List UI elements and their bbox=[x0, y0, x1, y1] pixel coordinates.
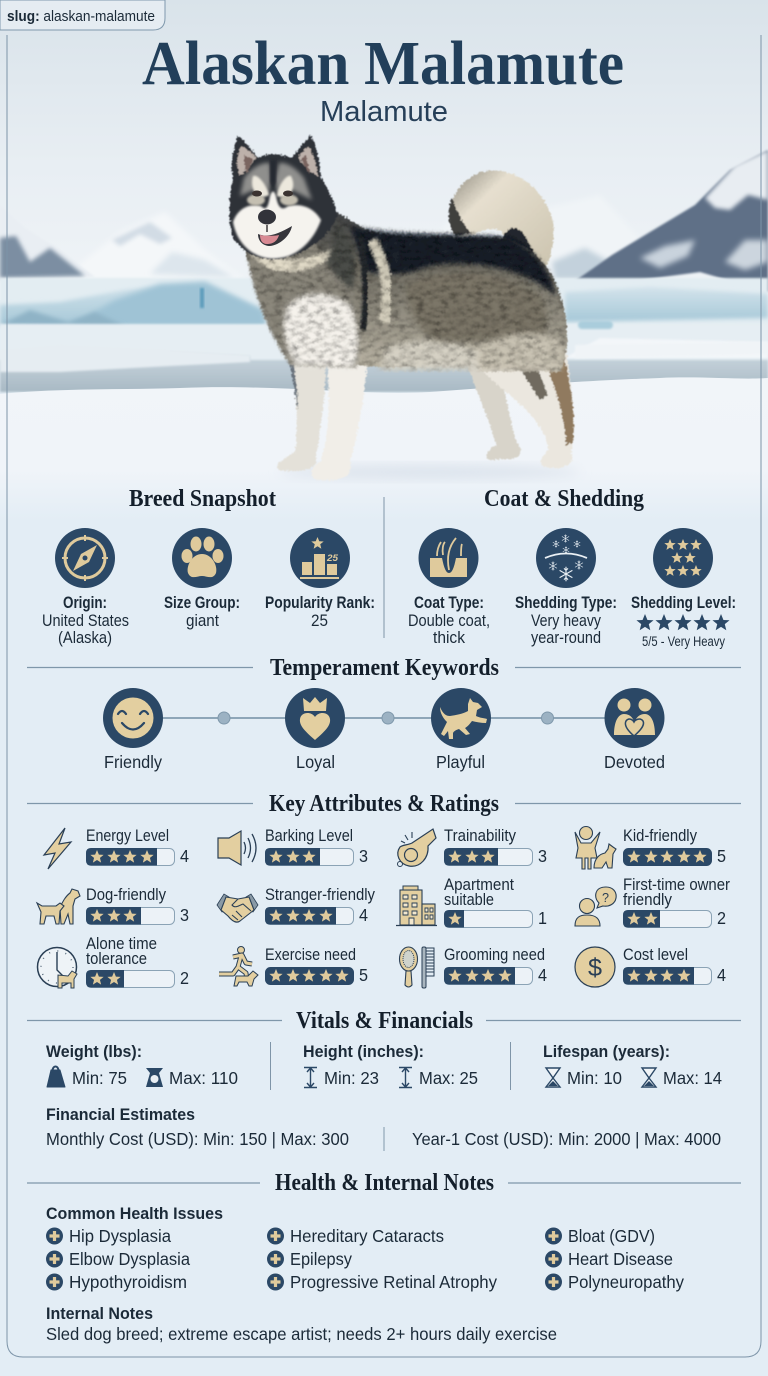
attribute: grooming need: 4 bbox=[538, 965, 547, 985]
torso bbox=[243, 195, 567, 372]
attribute: apartment suitable: Apartment bbox=[444, 875, 514, 894]
attribute: cost level: $ bbox=[588, 954, 602, 982]
attribute: dog-friendly: 3 bbox=[180, 905, 189, 925]
attribute: trainability: 3 bbox=[538, 846, 547, 866]
internal notes: Internal Notes bbox=[46, 1304, 153, 1323]
vitals: weight: Min: 75 bbox=[72, 1068, 127, 1088]
attribute: stranger-friendly bbox=[217, 885, 375, 925]
heading: breed snapshot: Breed Snapshot bbox=[129, 486, 276, 512]
heading: temperament keywords: Temperament Keywords bbox=[270, 655, 499, 681]
common health issues bbox=[46, 1204, 684, 1292]
shedding type text: Shedding Type: bbox=[515, 593, 617, 612]
attribute: dog-friendly: Dog-friendly bbox=[86, 885, 166, 904]
attribute: apartment suitable: suitable bbox=[444, 890, 494, 909]
connector line with dots bbox=[160, 712, 610, 724]
near rear leg bbox=[468, 345, 574, 468]
popularity rank text: 25 bbox=[311, 611, 328, 630]
icon: podium rank: 25 bbox=[326, 553, 339, 563]
icon: playful leaping dog bbox=[431, 688, 491, 748]
subtitle: Malamute bbox=[320, 96, 448, 128]
vitals: lifespan: Lifespan (years): bbox=[543, 1042, 670, 1061]
attribute: alone time tolerance: Alone time bbox=[86, 934, 157, 953]
attribute: trainability bbox=[398, 826, 547, 866]
common health issues: Common Health Issues bbox=[46, 1204, 223, 1223]
head base bbox=[229, 135, 338, 260]
icon: devoted people heart bbox=[604, 688, 664, 748]
attribute: alone time tolerance bbox=[38, 934, 189, 988]
coat type text bbox=[408, 593, 490, 647]
tail plume bbox=[450, 171, 554, 270]
attribute: alone time tolerance: tolerance bbox=[86, 949, 147, 968]
common health issues: Hereditary Cataracts bbox=[290, 1226, 444, 1246]
divider bbox=[383, 497, 385, 638]
attribute: cost level bbox=[575, 945, 726, 987]
attribute: kid-friendly: 5 bbox=[717, 846, 726, 866]
attribute: exercise need bbox=[219, 945, 368, 986]
vitals: height bbox=[303, 1042, 478, 1088]
common health issues: Epilepsy bbox=[290, 1249, 352, 1269]
attribute: stranger-friendly: Stranger-friendly bbox=[265, 885, 375, 904]
coat type text: Coat Type: bbox=[414, 593, 484, 612]
icon: coat hair follicle bbox=[418, 528, 478, 588]
financial estimates: Financial Estimates bbox=[46, 1105, 195, 1124]
panel: breed snapshot bbox=[42, 486, 375, 647]
vitals: lifespan: Min: 10 bbox=[567, 1068, 622, 1088]
vitals: lifespan bbox=[543, 1042, 722, 1088]
attribute: barking level: 3 bbox=[359, 846, 368, 866]
attribute: kid-friendly bbox=[575, 826, 726, 869]
shedding type text bbox=[515, 593, 617, 647]
attribute: first-time owner friendly: 2 bbox=[717, 908, 726, 928]
size group text: Size Group: bbox=[164, 593, 240, 612]
slug tag: slug: alaskan-malamute bbox=[7, 9, 155, 25]
heading: vitals and financials: Vitals & Financials bbox=[296, 1008, 473, 1034]
attribute: first-time owner friendly: friendly bbox=[623, 890, 672, 909]
common health issues: Progressive Retinal Atrophy bbox=[290, 1272, 497, 1292]
near front leg bbox=[311, 345, 369, 480]
far rear leg bbox=[462, 352, 521, 460]
section: health and internal notes bbox=[27, 1170, 741, 1344]
label: loyal: Loyal bbox=[296, 752, 335, 772]
heading: coat and shedding: Coat & Shedding bbox=[484, 486, 644, 512]
origin text bbox=[42, 593, 129, 647]
icon: loyal crown heart bbox=[285, 688, 345, 748]
attribute: energy level bbox=[44, 826, 189, 869]
attribute: barking level bbox=[218, 826, 368, 866]
origin text: United States bbox=[42, 611, 129, 630]
vitals: height: Height (inches): bbox=[303, 1042, 424, 1061]
section: vitals and financials bbox=[27, 1008, 741, 1151]
shedding level text and stars: 5/5 - Very Heavy bbox=[642, 634, 725, 649]
label: playful: Playful bbox=[436, 752, 485, 772]
icon: friendly smile bbox=[103, 688, 163, 748]
attribute: energy level: Energy Level bbox=[86, 826, 169, 845]
attribute: first-time owner friendly: ? bbox=[602, 890, 609, 905]
attribute: grooming need bbox=[400, 945, 547, 988]
shoulder stripes bbox=[372, 240, 387, 322]
financial estimates: Year-1 Cost (USD): Min: 2000 | Max: 4000 bbox=[412, 1129, 721, 1149]
label: friendly: Friendly bbox=[104, 752, 162, 772]
icon: compass bbox=[55, 528, 115, 588]
panel: coat and shedding bbox=[408, 486, 736, 649]
hero photo: Alaskan Malamute dog bbox=[229, 135, 574, 480]
attribute: stranger-friendly: 4 bbox=[359, 905, 368, 925]
attribute: exercise need: Exercise need bbox=[265, 945, 356, 964]
vitals: height: Min: 23 bbox=[324, 1068, 379, 1088]
common health issues: Heart Disease bbox=[568, 1249, 673, 1269]
slug tag bbox=[0, 0, 165, 30]
attribute: exercise need: 5 bbox=[359, 965, 368, 985]
far front leg bbox=[277, 352, 326, 471]
head markings bbox=[240, 163, 271, 196]
coat type text: thick bbox=[433, 628, 465, 647]
icon: snow shedding bbox=[536, 528, 596, 588]
origin text: Origin: bbox=[63, 593, 107, 612]
attribute: trainability: Trainability bbox=[444, 826, 516, 845]
shedding level text and stars: Shedding Level: bbox=[631, 593, 736, 612]
internal notes: Sled dog breed; extreme escape artist; needs 2+ hours daily exercise bbox=[46, 1324, 557, 1344]
size group text: giant bbox=[186, 611, 219, 630]
chest bbox=[245, 222, 360, 368]
attribute: apartment suitable bbox=[396, 875, 547, 928]
attribute: cost level: Cost level bbox=[623, 945, 688, 964]
attribute: cost level: 4 bbox=[717, 965, 726, 985]
common health issues: Bloat (GDV) bbox=[568, 1226, 655, 1246]
common health issues: Hypothyroidism bbox=[69, 1272, 187, 1292]
shedding type text: year-round bbox=[531, 628, 601, 647]
title: Alaskan Malamute bbox=[142, 30, 624, 98]
popularity rank text bbox=[265, 593, 375, 630]
icon: podium rank bbox=[290, 528, 350, 588]
attribute: kid-friendly: Kid-friendly bbox=[623, 826, 697, 845]
size group text bbox=[164, 593, 240, 630]
icon: eight stars bbox=[653, 528, 713, 588]
heading: health and internal notes: Health & Internal Notes bbox=[275, 1170, 494, 1196]
attribute: barking level: Barking Level bbox=[265, 826, 353, 845]
origin text: (Alaska) bbox=[58, 628, 112, 647]
common health issues: Hip Dysplasia bbox=[69, 1226, 171, 1246]
attribute: apartment suitable: 1 bbox=[538, 908, 547, 928]
financial estimates bbox=[46, 1105, 721, 1151]
common health issues: Polyneuropathy bbox=[568, 1272, 684, 1292]
label: devoted: Devoted bbox=[604, 752, 665, 772]
popularity rank text: Popularity Rank: bbox=[265, 593, 375, 612]
shedding level text and stars bbox=[631, 593, 736, 649]
vitals: weight: Max: 110 bbox=[169, 1068, 238, 1088]
attribute: alone time tolerance: 2 bbox=[180, 968, 189, 988]
coat type text: Double coat, bbox=[408, 611, 490, 630]
section: key attributes and ratings bbox=[27, 791, 741, 988]
attribute: first-time owner friendly: First-time owner bbox=[623, 875, 730, 894]
common health issues: Elbow Dysplasia bbox=[69, 1249, 190, 1269]
section: temperament keywords bbox=[27, 655, 741, 772]
heading: key attributes: Key Attributes & Ratings bbox=[269, 791, 499, 817]
icon: paw bbox=[172, 528, 232, 588]
attribute: first-time owner friendly bbox=[575, 875, 730, 928]
attribute: energy level: 4 bbox=[180, 846, 189, 866]
internal notes bbox=[46, 1304, 557, 1344]
vitals: height: Max: 25 bbox=[419, 1068, 478, 1088]
vitals: weight: Weight (lbs): bbox=[46, 1042, 142, 1061]
vitals: lifespan: Max: 14 bbox=[663, 1068, 722, 1088]
attribute: dog-friendly bbox=[37, 885, 189, 925]
shedding type text: Very heavy bbox=[531, 611, 601, 630]
vitals: weight bbox=[46, 1042, 238, 1088]
attribute: grooming need: Grooming need bbox=[444, 945, 545, 964]
financial estimates: Monthly Cost (USD): Min: 150 | Max: 300 bbox=[46, 1129, 349, 1149]
